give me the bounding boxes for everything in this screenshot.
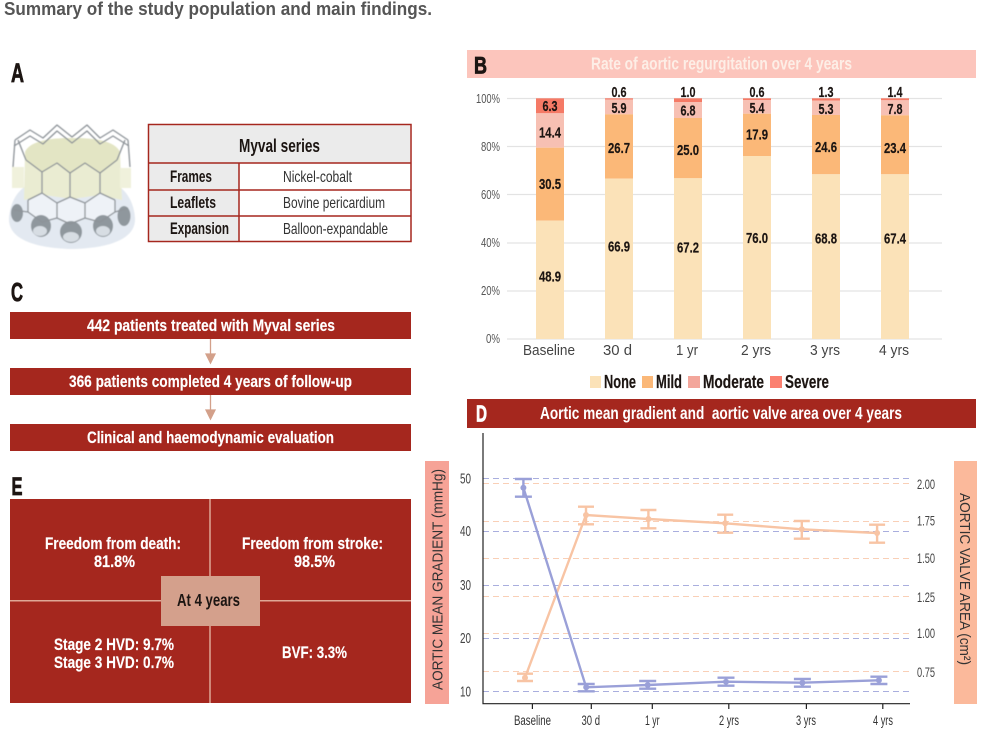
table: Myval series: Frames (170, 168, 212, 186)
flow box: evaluation (10, 424, 411, 451)
x axis categories: 4 yrs (879, 343, 909, 359)
stacked bar: 30 d (605, 84, 633, 339)
y axis and gridlines: 40% (481, 235, 500, 250)
left axis ticks (460, 470, 471, 700)
stacked bar: baseline: 14.4 (539, 124, 561, 141)
right axis ticks: 0.75 (917, 664, 935, 680)
header: panel B: B (474, 52, 487, 80)
arrow: follow-up to evaluation (206, 395, 215, 419)
stacked bar: 2 yrs: 5.4 (750, 100, 765, 117)
panel E: outcomes at 4 years (10, 473, 411, 703)
legend: Moderate (703, 371, 764, 392)
legend: None (604, 371, 636, 392)
left axis label band (425, 461, 449, 704)
chart axes (483, 433, 910, 709)
stacked bar: 4 yrs: 67.4 (884, 231, 906, 248)
outcome: BVF: BVF: 3.3% (282, 643, 347, 662)
flow box: evaluation: Clinical and haemodynamic evaluation (87, 429, 334, 447)
stacked bar: 30 d: 5.9 (612, 100, 626, 117)
stacked bar: 30 d: 0.6 (612, 84, 626, 101)
stacked bar: 3 yrs: 24.6 (815, 139, 837, 156)
legend: Severe (785, 371, 829, 392)
table: Myval series (148, 124, 411, 242)
table: Myval series: Leaflets (170, 194, 216, 212)
stacked bar: 1 yr: 6.8 (680, 103, 696, 120)
y axis and gridlines: 80% (481, 139, 500, 154)
x axis categories: Baseline (523, 343, 575, 359)
outcome: freedom from death: Freedom from death: (45, 534, 181, 553)
x axis categories: 30 d (603, 343, 632, 359)
series: aortic valve area (517, 507, 885, 681)
outcome: HVD: Stage 3 HVD: 0.7% (54, 653, 174, 672)
heading: E: E (12, 473, 22, 501)
stacked bar: 1 yr: 1.0 (680, 84, 696, 101)
table: Myval series: Balloon-expandable (283, 221, 388, 238)
stacked bar: 3 yrs: 68.8 (815, 231, 837, 248)
stacked bar: 4 yrs: 23.4 (884, 140, 906, 157)
series: aortic mean gradient (515, 479, 887, 691)
dashed gridlines (483, 478, 910, 692)
left axis label band: AORTIC MEAN GRADIENT (mmHg) (430, 469, 446, 690)
stacked bar: baseline: 48.9 (539, 269, 561, 286)
x axis categories: 1 yr (676, 343, 698, 359)
right axis ticks: 1.75 (917, 512, 935, 528)
stacked bar: baseline: 30.5 (539, 176, 561, 193)
flow box: follow-up: 366 patients completed 4 years of follow-up (69, 373, 352, 391)
panel C: patient flow (10, 277, 411, 451)
y axis and gridlines: 100% (476, 91, 500, 106)
quadrant background (10, 499, 411, 703)
center label: at 4 years: At 4 years (177, 590, 240, 610)
table: Myval series: Bovine pericardium (283, 195, 385, 212)
outcome: freedom from death (45, 534, 181, 571)
right axis ticks: 1.25 (917, 589, 935, 605)
left axis ticks: 50 (460, 470, 471, 488)
stacked bar: 3 yrs (812, 84, 840, 339)
x axis categories: 30 d (582, 713, 600, 728)
right axis ticks (917, 476, 935, 680)
outcome: HVD (54, 635, 174, 672)
x axis categories: 2 yrs (719, 713, 739, 728)
legend: Mild (656, 371, 682, 392)
right axis ticks: 2.00 (917, 476, 935, 492)
stacked bar: baseline (536, 98, 564, 339)
stacked bar: 4 yrs: 7.8 (888, 101, 902, 118)
y axis and gridlines (476, 91, 942, 346)
legend (590, 371, 829, 392)
x axis categories: 4 yrs (873, 713, 893, 728)
stacked bar: 4 yrs: 1.4 (888, 84, 903, 101)
x axis categories: 1 yr (645, 713, 660, 728)
stacked bar: 1 yr: 67.2 (677, 240, 699, 257)
table: Myval series: Nickel-cobalt (283, 169, 352, 186)
left axis ticks: 30 (460, 577, 471, 594)
flow box: follow-up (10, 368, 411, 395)
x axis categories: 3 yrs (810, 343, 840, 359)
outcome: freedom from stroke (242, 534, 383, 571)
panel B: aortic regurgitation (467, 50, 976, 392)
panel D: gradient and valve area (425, 399, 977, 728)
stacked bar: 1 yr: 25.0 (677, 142, 699, 159)
right axis ticks: 1.50 (917, 550, 935, 566)
arrow: treated to follow-up (206, 339, 215, 363)
y axis and gridlines: 60% (481, 187, 500, 202)
stacked bar: 3 yrs: 1.3 (818, 84, 834, 101)
table: Myval series: Myval series (239, 136, 320, 156)
panel A: device and specification table (9, 58, 411, 249)
outcome: freedom from death: 81.8% (94, 552, 135, 571)
flow box: patients treated: 442 patients treated with Myval series (87, 317, 335, 335)
icon: Myval valve illustration (9, 125, 135, 249)
x axis categories: 2 yrs (741, 343, 771, 359)
x axis categories: 3 yrs (796, 713, 816, 728)
heading: A: A (11, 58, 24, 88)
stacked bar: 2 yrs (743, 84, 771, 339)
stacked bar: 2 yrs: 0.6 (750, 84, 764, 101)
center label: at 4 years (161, 576, 260, 626)
stacked bar: 1 yr (674, 84, 702, 339)
y axis and gridlines: 0% (486, 331, 500, 346)
stacked bar: 3 yrs: 5.3 (818, 101, 834, 118)
left axis ticks: 10 (460, 684, 471, 700)
right axis ticks: 1.00 (917, 625, 935, 641)
right axis label band (954, 461, 977, 704)
outcome: freedom from stroke: Freedom from stroke: (242, 534, 383, 553)
stacked bar: 2 yrs: 76.0 (746, 230, 768, 247)
stacked bar: 4 yrs (881, 84, 909, 339)
left axis ticks: 20 (460, 630, 471, 647)
header: panel D (467, 399, 976, 428)
y axis and gridlines: 20% (481, 283, 500, 298)
header: panel B (467, 50, 976, 80)
stacked bar: 2 yrs: 17.9 (746, 127, 768, 144)
stacked bar: baseline: 6.3 (542, 98, 558, 115)
heading: C: C (11, 277, 23, 307)
outcome: freedom from stroke: 98.5% (294, 552, 335, 571)
header: panel D: D (476, 400, 487, 426)
outcome: HVD: Stage 2 HVD: 9.7% (54, 635, 174, 654)
left axis ticks: 40 (460, 523, 471, 540)
stacked bar: 30 d: 26.7 (608, 140, 630, 157)
table: Myval series: Expansion (170, 220, 229, 238)
right axis label band: AORTIC VALVE AREA (cm²) (956, 493, 973, 665)
header: panel B: Rate of aortic regurgitation over 4 years (591, 54, 852, 74)
stacked bar: 30 d: 66.9 (608, 239, 630, 256)
x axis categories (523, 343, 909, 359)
x axis categories: Baseline (514, 713, 551, 728)
flow box: patients treated (10, 312, 411, 339)
x axis categories (514, 713, 893, 728)
